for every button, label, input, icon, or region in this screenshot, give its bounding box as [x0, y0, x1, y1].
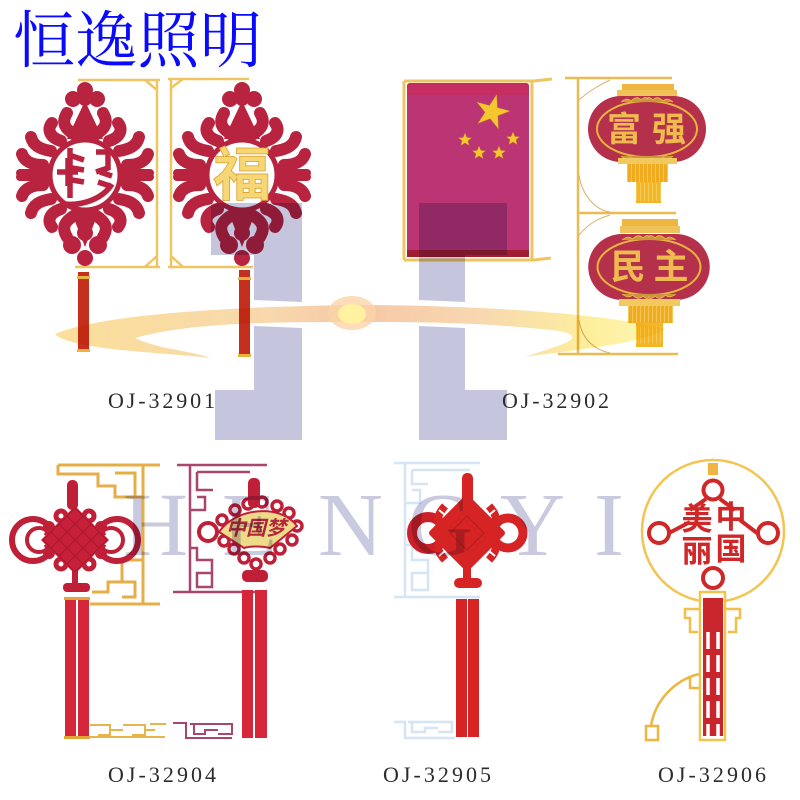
upper lantern: 富 [607, 111, 641, 149]
product OJ-32905: pale lattice with red knot [394, 463, 523, 738]
red foot [454, 562, 482, 588]
product codes [108, 388, 766, 787]
glow at ring centre [328, 296, 376, 330]
letters: H [123, 476, 188, 575]
knot characters: 丽 [682, 534, 712, 569]
letters: G [408, 476, 473, 575]
stylised character inside ring [57, 148, 112, 204]
double tassels [456, 599, 479, 737]
gold frame [168, 79, 253, 268]
giant H watermark [211, 203, 507, 440]
Chinese knot [12, 506, 138, 574]
red tassel [238, 270, 251, 357]
double tassels [242, 590, 267, 738]
bottom lattice [173, 723, 232, 738]
red foot [242, 570, 268, 582]
code OJ-32904: OJ-32904 [108, 762, 216, 787]
flag panel [407, 83, 529, 257]
upper lantern: 强 [652, 111, 686, 149]
gold frame [75, 80, 160, 268]
product OJ-32901 second piece: ornament with fu character [168, 79, 307, 357]
lower lantern [588, 219, 710, 347]
red stem [462, 473, 473, 505]
knot characters: 中 [716, 500, 746, 535]
lower lantern: 主 [653, 248, 689, 287]
letters: E [222, 476, 277, 575]
gold ring [642, 460, 784, 602]
fu character: 福 [213, 143, 271, 208]
code OJ-32902: OJ-32902 [502, 388, 609, 413]
letters: I [594, 476, 624, 575]
red tassel [77, 272, 90, 352]
lower lantern: 民 [610, 248, 646, 287]
red stem and foot [63, 480, 90, 592]
watermark HENGYI [123, 203, 624, 575]
side brackets [685, 609, 740, 632]
product OJ-32902: flag panel [404, 79, 552, 260]
code OJ-32905: OJ-32905 [383, 762, 491, 787]
letters [123, 476, 624, 575]
upper lantern [588, 84, 706, 203]
red knot ornament [177, 82, 307, 266]
flag stars [458, 90, 520, 158]
code OJ-32906: OJ-32906 [658, 762, 766, 787]
product OJ-32901: red ornament on gold frame [20, 80, 160, 352]
knot characters [682, 500, 746, 569]
knot characters: 美 [682, 502, 712, 537]
product OJ-32904 second piece: purple lattice with fan knot [173, 465, 302, 738]
product OJ-32904: gold lattice with Chinese knot [12, 465, 166, 739]
Chinese knot [412, 498, 523, 568]
gold arc with tab [646, 674, 699, 740]
letters: N [318, 476, 383, 575]
purple lattice frame [173, 465, 267, 592]
code OJ-32901: OJ-32901 [108, 388, 215, 413]
gold box with red tassel [700, 592, 725, 740]
gold lattice frame [58, 465, 160, 604]
gold flag frame [404, 79, 552, 260]
fan knot [199, 497, 302, 569]
letters: Y [500, 476, 565, 575]
knot characters: 国 [716, 532, 746, 567]
double tassels [64, 597, 90, 739]
product OJ-32906: gold circle with Chinese knot [642, 460, 784, 740]
red knot ornament [20, 82, 150, 266]
golden ring band [55, 305, 665, 358]
title: 恒逸照明 [13, 8, 262, 76]
knot rings and lines [649, 480, 778, 588]
product OJ-32902: double lantern [558, 78, 710, 354]
red stem [248, 478, 260, 508]
fan text: 中国梦 [226, 518, 289, 540]
pale blue lattice [394, 463, 480, 738]
lantern frame [558, 78, 678, 354]
bottom lattice [89, 724, 166, 737]
top tab [708, 463, 718, 475]
